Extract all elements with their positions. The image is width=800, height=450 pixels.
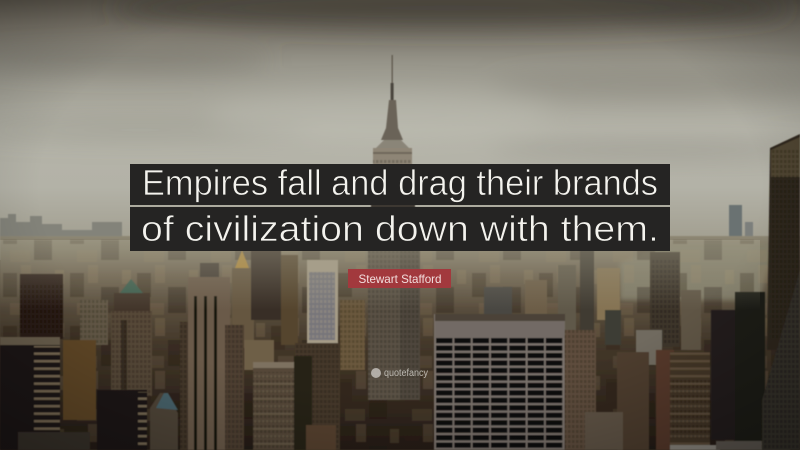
quote box: first line: Empires fall and drag their brands	[142, 162, 658, 203]
building: towers centre-right	[484, 250, 701, 450]
building: foreground grid office block	[434, 314, 565, 450]
building: dark block and blue roof	[97, 390, 178, 450]
background: overcast sky	[0, 0, 800, 260]
building: tall tower far right	[762, 134, 800, 450]
author label	[348, 269, 451, 288]
watermark: quotefancy: quotefancy	[384, 368, 428, 379]
building: dark tower left	[20, 274, 63, 339]
building: foreground block centre-left	[253, 356, 336, 450]
building: tan block beside grid block	[565, 330, 623, 450]
quote box: second line: of civilization down with them.	[141, 208, 659, 249]
building: dark glass towers right	[711, 292, 790, 450]
distant city and water	[0, 205, 800, 450]
building: brown blocks right	[656, 350, 720, 450]
building: mid-ground towers left	[63, 250, 365, 420]
building: tall striped tower	[180, 263, 244, 450]
atmospheric haze over upper city	[0, 240, 760, 310]
building: white tower	[295, 260, 340, 450]
building: striped block left	[0, 337, 90, 450]
building: green-roofed tower	[111, 279, 152, 396]
building: Empire State Building	[368, 55, 420, 400]
author label: Stewart Stafford	[358, 272, 442, 286]
